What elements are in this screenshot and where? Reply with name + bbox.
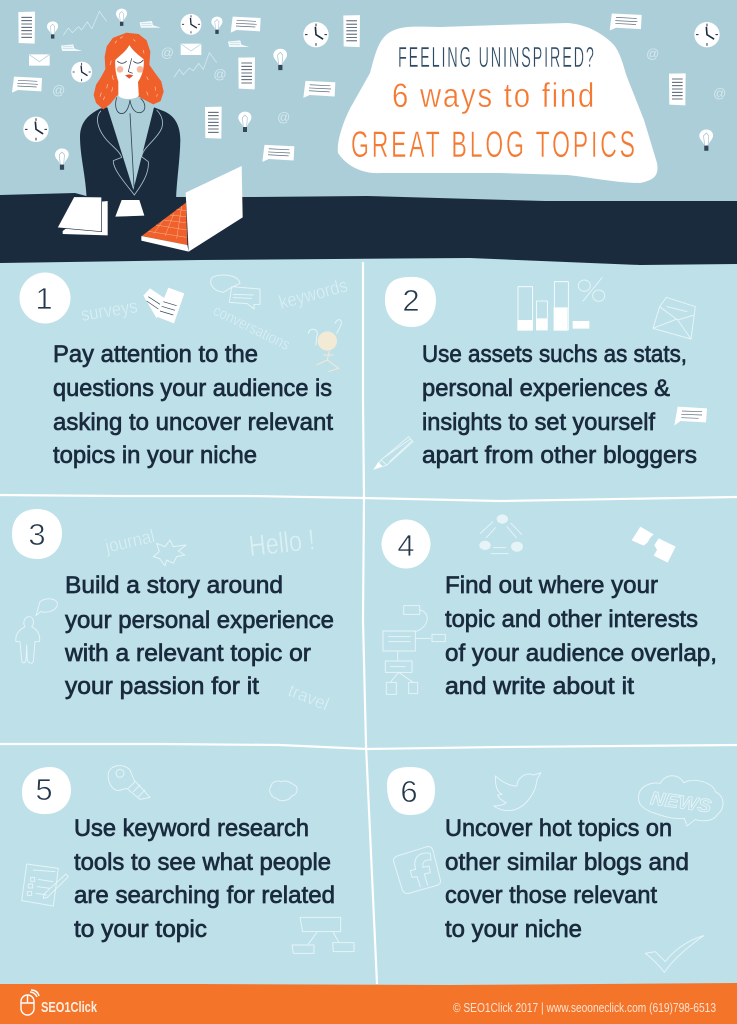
at signs: @ <box>713 85 726 100</box>
header background <box>0 0 737 262</box>
icons: envelopes <box>29 44 201 66</box>
key doodle <box>108 766 150 799</box>
doodles 6 <box>393 773 723 972</box>
text block 5: are searching for related <box>74 882 335 909</box>
panel 4 <box>382 514 717 700</box>
title line 1: FEELING UNINSPIRED? <box>398 40 594 73</box>
panels background <box>0 258 737 988</box>
text block 6: other similar blogs and <box>445 849 689 876</box>
papers <box>57 197 108 235</box>
panel 3 <box>12 509 334 714</box>
title blob <box>338 23 657 183</box>
number badge 2 <box>385 277 436 327</box>
text block 4: and write about it <box>445 673 634 700</box>
at signs: @ <box>213 67 227 82</box>
hair <box>94 33 163 109</box>
text block 5: tools to see what people <box>74 849 331 876</box>
cloud doodle <box>270 781 297 801</box>
text block 6: Uncover hot topics on <box>445 815 672 842</box>
title line 3: GREAT BLOG TOPICS <box>351 123 635 165</box>
number 1: 1 <box>35 281 53 316</box>
text block 5: to your topic <box>74 916 207 943</box>
text block 2: insights to set yourself <box>422 409 655 436</box>
doodles 3: Hello ! <box>247 524 316 563</box>
doodles 1: conversations <box>210 302 292 354</box>
text block 1: questions your audience is <box>53 375 332 402</box>
text block 3: with a relevant topic or <box>64 640 311 667</box>
number 2: 2 <box>402 283 420 318</box>
text block 5 <box>74 815 335 943</box>
check mark doodle <box>645 936 704 972</box>
checklist doodle <box>22 864 58 906</box>
text block 2: apart from other bloggers <box>422 442 697 469</box>
panel 2 <box>374 277 707 469</box>
at signs: @ <box>646 46 659 61</box>
text block 1: topics in your niche <box>53 442 257 469</box>
facebook icon doodle <box>393 846 441 894</box>
facial features <box>117 58 143 73</box>
cycle doodle <box>479 514 523 554</box>
text block 4: of your audience overlap, <box>445 640 717 667</box>
text block 6: cover those relevant <box>445 882 657 909</box>
note on desk <box>115 200 144 217</box>
laptop <box>141 166 243 252</box>
number 3: 3 <box>28 517 46 552</box>
icons: zigzag lines <box>63 11 217 77</box>
at signs: @ <box>161 45 174 60</box>
text block 2 <box>422 341 697 469</box>
header illustration: floating doodles <box>12 9 726 170</box>
icons: light bulbs <box>47 9 713 170</box>
percent doodle <box>578 278 605 301</box>
text block 4 <box>445 572 717 700</box>
number badge 3 <box>12 509 62 559</box>
title text <box>351 40 635 165</box>
doodles 3: travel <box>286 680 332 714</box>
bar chart doodle <box>517 282 589 331</box>
text block 2: personal experiences & <box>422 375 670 402</box>
doodles 5 <box>22 766 354 953</box>
doodles 4 <box>383 514 676 694</box>
number 5: 5 <box>35 772 53 807</box>
text block 3: your passion for it <box>65 673 259 700</box>
text block 3 <box>64 572 334 700</box>
footer bar <box>0 983 737 1024</box>
illustration: woman at laptop <box>57 33 243 252</box>
number badge 5 <box>22 767 71 814</box>
text block 5: Use keyword research <box>74 815 309 842</box>
text block 6: to your niche <box>445 916 582 943</box>
panel 5 <box>22 766 354 953</box>
doodles 2 <box>374 278 707 469</box>
text block 1: Pay attention to the <box>53 341 258 368</box>
dark desk band <box>0 193 737 265</box>
blazer <box>80 107 180 200</box>
icons: hands <box>61 21 249 51</box>
at signs: @ <box>52 82 65 97</box>
blazer lapels <box>98 110 163 195</box>
doodles 1 <box>79 275 350 372</box>
doodles 3 <box>16 524 332 714</box>
text block 4: Find out where your <box>445 572 658 599</box>
number badge 6 <box>387 767 435 815</box>
footer logo <box>21 990 98 1016</box>
news bubble doodle <box>639 776 723 826</box>
note bubble <box>674 407 707 426</box>
flowchart doodle <box>383 606 445 694</box>
brand name: SEO1Click <box>41 1000 98 1016</box>
collar <box>116 97 145 114</box>
text block 2: Use assets suchs as stats, <box>422 341 687 368</box>
mouth <box>125 74 133 79</box>
icons: speech bubbles <box>12 13 642 162</box>
number badge 1 <box>20 272 70 324</box>
twitter bird doodle <box>494 773 541 811</box>
number 4: 4 <box>397 528 415 563</box>
doodles 3: journal <box>103 526 157 558</box>
panel 1 <box>20 272 350 469</box>
mouse icon <box>21 990 39 1015</box>
at signs: @ <box>277 110 290 125</box>
text block 1: asking to uncover relevant <box>53 409 333 436</box>
doodles 1: keywords <box>277 275 350 314</box>
org chart doodle <box>292 917 354 953</box>
icons: notes <box>18 12 686 139</box>
puzzle pieces <box>632 527 676 563</box>
title line 2: 6 ways to find <box>392 76 594 115</box>
cheeks <box>117 66 123 73</box>
hair strands <box>100 37 157 100</box>
face and neck <box>115 45 144 99</box>
text block 3: your personal experience <box>65 607 334 634</box>
grid divider lines <box>0 262 737 984</box>
at signs <box>52 45 726 125</box>
icons: clocks <box>23 14 720 142</box>
pencil doodle <box>374 437 413 469</box>
envelope doodle <box>653 297 695 339</box>
number badge 4 <box>382 520 430 568</box>
text block 4: topic and other interests <box>445 606 698 633</box>
text block 1 <box>53 341 333 469</box>
number 6: 6 <box>400 774 418 809</box>
text block 3: Build a story around <box>65 572 283 599</box>
doodles 1: surveys <box>79 296 139 326</box>
news word: NEWS <box>649 787 713 817</box>
panel 6 <box>387 767 723 972</box>
text block 6 <box>445 815 689 943</box>
